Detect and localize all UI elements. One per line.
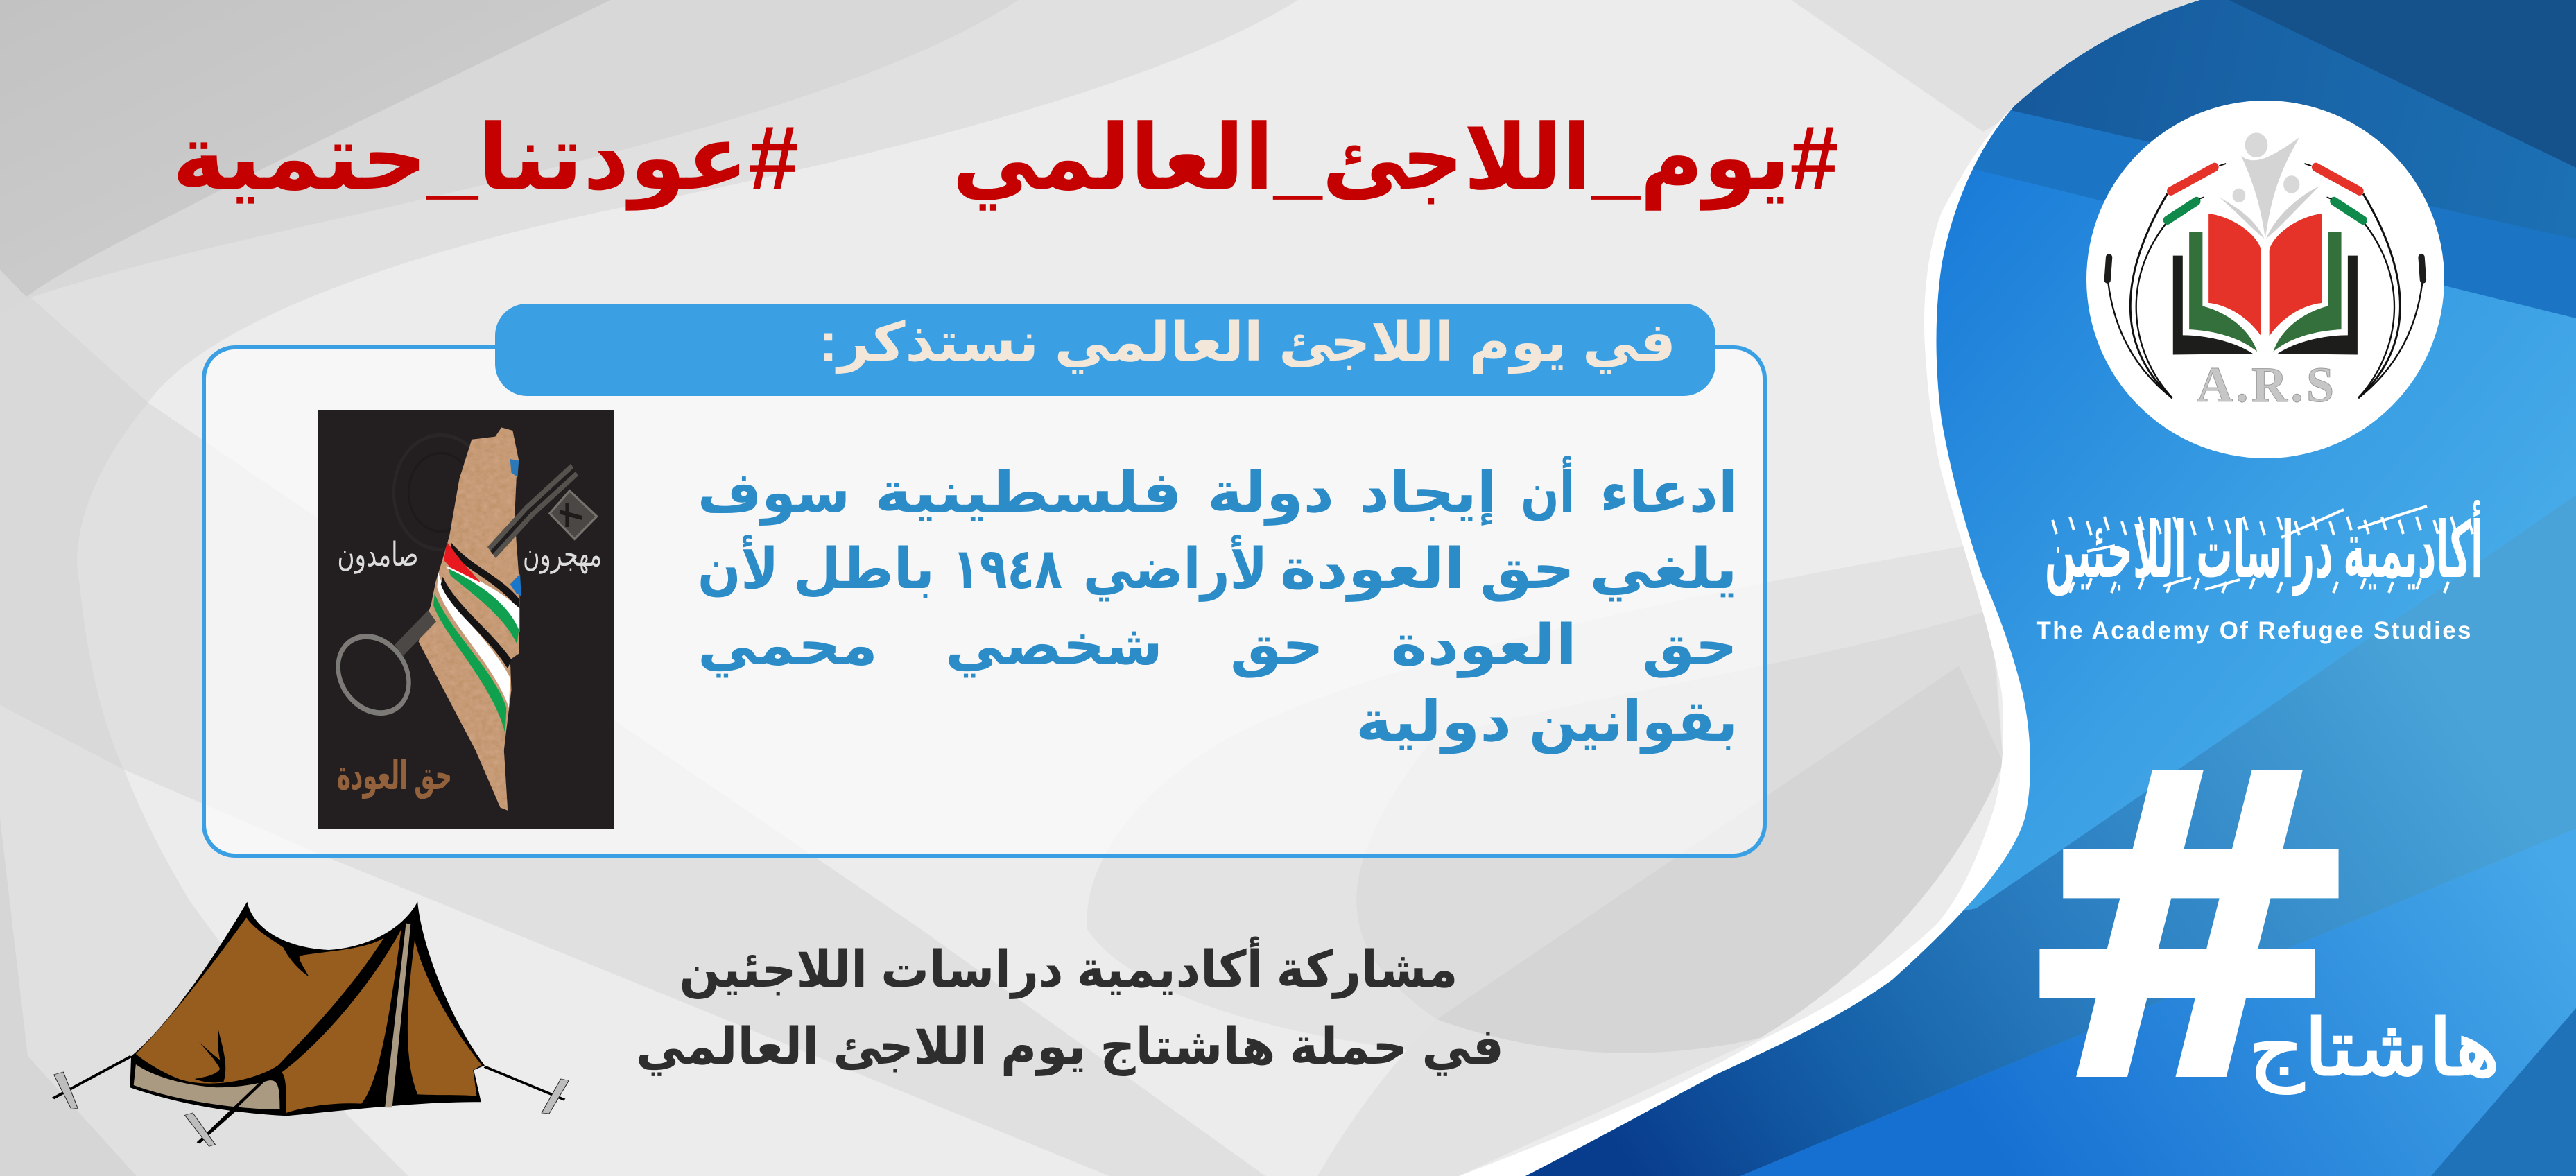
- body text line 3: [698, 614, 1738, 678]
- body text line 2: ١٩٤٨: [952, 538, 1062, 600]
- body text line 1: سوف: [698, 462, 850, 526]
- body text line 2: يلغي: [1589, 538, 1738, 602]
- body text line 2: لأن: [698, 535, 779, 600]
- heading pill: [495, 304, 1715, 396]
- text: academy english name: The Academy Of Refugee Studies: [2036, 617, 2471, 644]
- cover artwork: map, flag and keys: [327, 428, 597, 811]
- cover label: left: صامدون: [337, 537, 419, 574]
- body text line 2: العودة: [1280, 538, 1465, 602]
- icon: large hash sign: #: [2014, 684, 2365, 1173]
- body text line 1: [698, 456, 1738, 526]
- body text line 3: حق: [1642, 614, 1738, 678]
- body text line 4: بقوانين: [1529, 691, 1738, 754]
- body text line 2: حق: [1480, 538, 1575, 602]
- icon: tent: [53, 902, 569, 1146]
- body text line 3: حق: [1230, 614, 1324, 678]
- book cover image: right of return: [318, 410, 614, 829]
- text: participation line 2: في حملة هاشتاج يوم اللاجئ العالمي: [636, 1019, 1504, 1076]
- panel: blue side background: [1456, 0, 2576, 1176]
- body text line 2: باطل: [793, 538, 935, 600]
- text: hashtag word: هاشتاج: [2248, 1005, 2500, 1093]
- body text line 4: [1356, 691, 1738, 754]
- panel: main content box: [204, 304, 1765, 856]
- body text line 2: لأراضي: [1083, 535, 1268, 602]
- body text line 1: إيجاد: [1359, 462, 1497, 526]
- logo initials: A.R.S: [2197, 357, 2334, 413]
- body text line 1: أن: [1521, 456, 1575, 524]
- panel: white ribbon edge: [1459, 106, 2080, 1176]
- title: hashtag 1: #يوم_اللاجئ_العالمي: [952, 107, 1838, 211]
- body text line 3: محمي: [698, 614, 878, 678]
- logo: white circle with ARS emblem: [2086, 101, 2444, 458]
- heading pill: في يوم اللاجئ العالمي نستذكر:: [819, 311, 1676, 374]
- emblem artwork: [2107, 132, 2423, 398]
- body text line 1: دولة: [1207, 462, 1334, 526]
- body text line 3: العودة: [1391, 614, 1577, 678]
- body text line 1: ادعاء: [1600, 462, 1738, 524]
- body text line 1: فلسطينية: [874, 462, 1182, 524]
- body text line 4: دولية: [1356, 691, 1512, 754]
- text: participation line 1: مشاركة أكاديمية دراسات اللاجئين: [680, 936, 1458, 999]
- title: hashtag 2: #عودتنا_حتمية: [172, 107, 799, 211]
- body text line 2: [698, 535, 1738, 602]
- cover title: حق العودة: [337, 753, 452, 799]
- body text line 3: شخصي: [945, 614, 1163, 678]
- cover label: right: مهجرون: [523, 537, 602, 574]
